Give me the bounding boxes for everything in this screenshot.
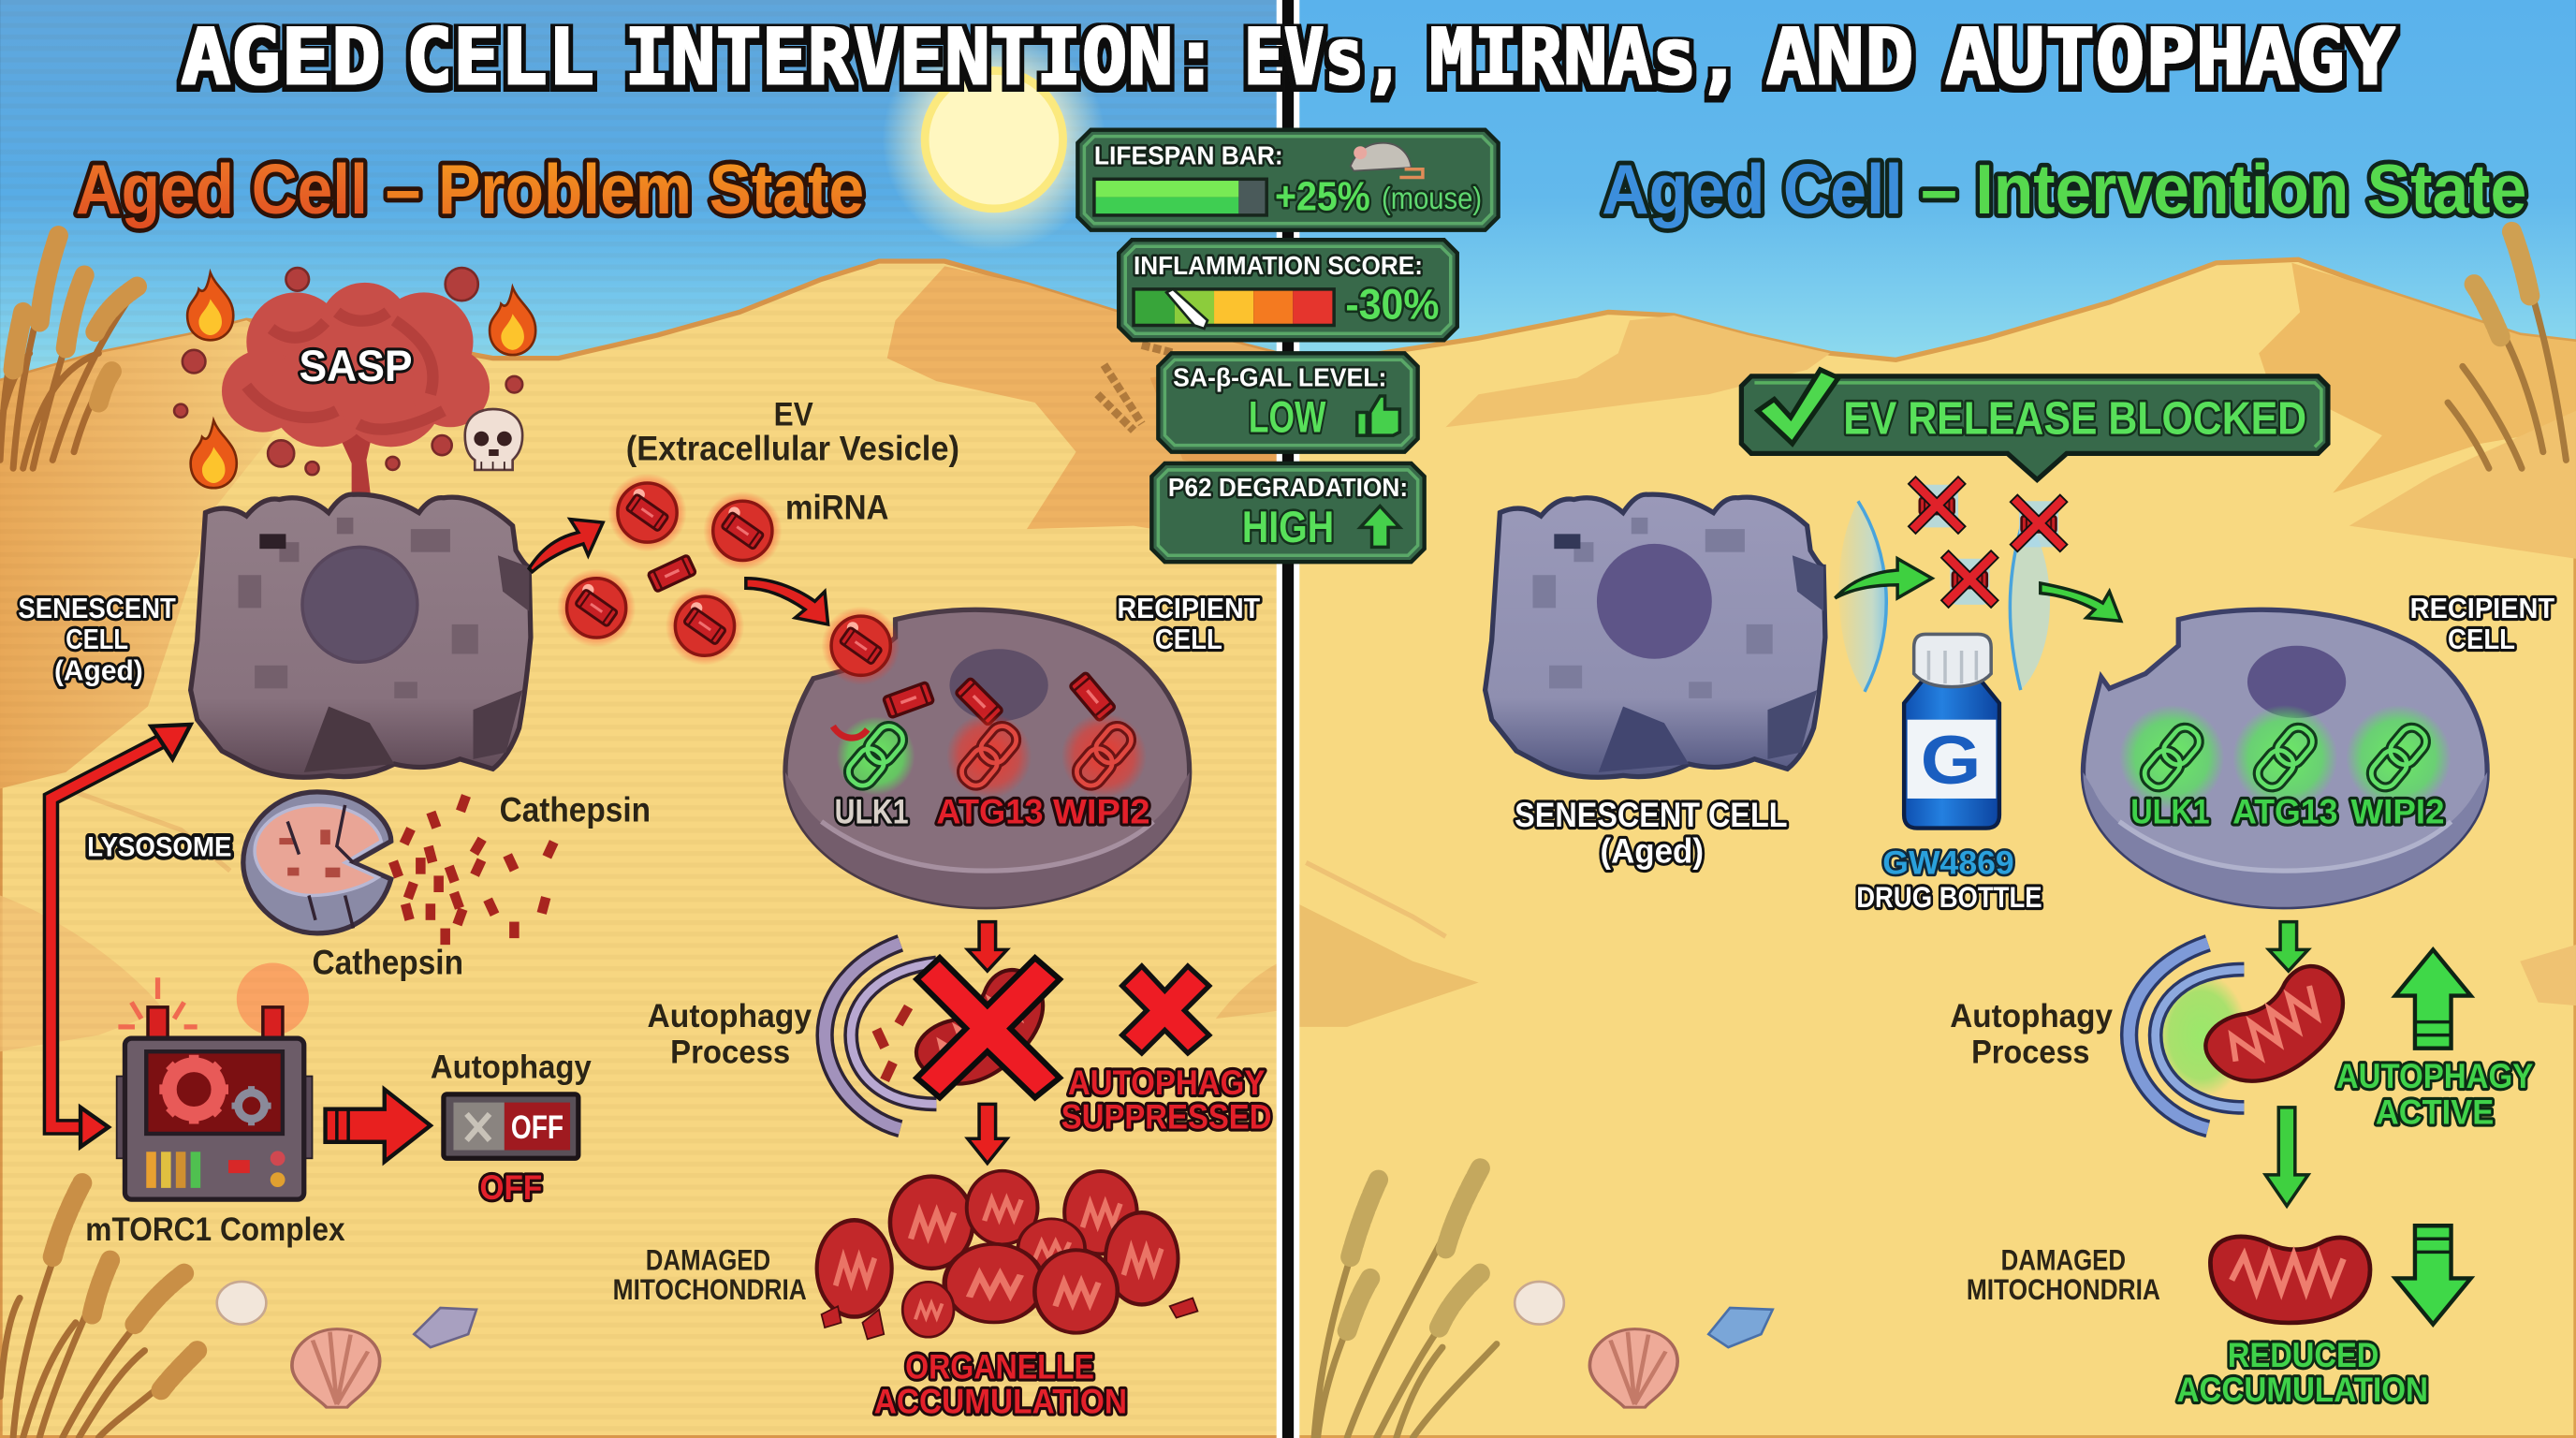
- label: recipient cell: CELL: [1155, 623, 1222, 655]
- label: reduced accumulation: [2176, 1336, 2428, 1409]
- title: INTERVENTION:: [624, 13, 1219, 103]
- label: senescent cell: (Aged): [54, 654, 143, 687]
- label: GW4869 drug bottle: GW4869: [1882, 845, 2014, 882]
- label: damaged mitochondria left: DAMAGED: [646, 1243, 770, 1277]
- label: miRNA: miRNA: [785, 489, 889, 527]
- pathway: ULK1: [2119, 705, 2224, 830]
- grass: bottom right: [1314, 1168, 1497, 1438]
- autophagy suppressed: AUTOPHAGY: [1068, 1064, 1265, 1102]
- pathway: WIPI2: WIPI2: [1053, 792, 1150, 830]
- icon: thumbs up: [1357, 396, 1399, 435]
- shells left: [217, 1282, 476, 1407]
- label: autophagy: Autophagy: [431, 1049, 592, 1085]
- label: autophagy process problem: Process: [670, 1034, 790, 1071]
- label: senescent cell intervention: SENESCENT CELL: [1515, 796, 1788, 834]
- text: SASP: SASP: [299, 342, 413, 391]
- label: senescent cell: [18, 592, 176, 687]
- label: INFLAMMATION SCORE:: [1134, 251, 1423, 280]
- SASP cloud: [174, 268, 522, 501]
- center divider: [1277, 0, 1299, 1438]
- shield left: [1838, 501, 1886, 692]
- value: HIGH: [1242, 503, 1334, 552]
- label: organelle accumulation: ACCUMULATION: [874, 1382, 1127, 1420]
- hud panel: p62 degradation: [1151, 463, 1425, 562]
- heading: problem state: Aged Cell – Problem State: [76, 150, 864, 228]
- label: senescent cell: SENESCENT: [18, 592, 176, 624]
- pathway: WIPI2: [1053, 713, 1150, 830]
- value: LOW: [1249, 393, 1326, 443]
- autophagosome active: [2130, 943, 2364, 1129]
- label: autophagy process intervention: Autophagy: [1950, 998, 2113, 1034]
- label: reduced accumulation: ACCUMULATION: [2176, 1371, 2428, 1409]
- label: cathepsin lower: Cathepsin: [313, 944, 463, 982]
- gauge bar: [1134, 289, 1334, 329]
- label: recipient cell intervention: [2410, 592, 2554, 655]
- grass: bottom left: [0, 1183, 198, 1438]
- particles: [174, 268, 522, 475]
- title: AUTOPHAGY: [1945, 13, 2395, 103]
- label: autophagy process intervention: Process: [1971, 1034, 2089, 1071]
- damaged mitochondria pile: [817, 1171, 1197, 1339]
- heading: intervention state: Aged Cell – Intervention State: [1602, 150, 2526, 228]
- lysosome: [87, 792, 391, 933]
- shells right: [1515, 1282, 1773, 1407]
- arrow: mTORC1 to switch: [326, 1090, 431, 1162]
- label: damaged mitochondria right: DAMAGED: [2001, 1243, 2126, 1277]
- autophagy active: AUTOPHAGY: [2336, 1057, 2533, 1095]
- label: damaged mitochondria right: [1967, 1243, 2160, 1306]
- icon: check mark: [1758, 370, 1838, 444]
- label: autophagy process problem: [648, 998, 812, 1071]
- arrow: recipient to autophagy problem: [968, 922, 1007, 971]
- label: recipient cell intervention: RECIPIENT: [2410, 592, 2554, 624]
- arrow: reduced accumulation: [2395, 1225, 2471, 1325]
- title: [181, 13, 2395, 103]
- text: EV RELEASE BLOCKED: [1843, 393, 2306, 444]
- label: autophagy process problem: Autophagy: [648, 998, 812, 1034]
- label: recipient cell: RECIPIENT: [1117, 592, 1260, 624]
- recipient cell: problem: [785, 607, 1190, 907]
- hud panel: sa-beta-gal: [1158, 353, 1418, 452]
- label: extracellular vesicle: EV: [774, 397, 813, 433]
- icons: flames: [187, 272, 535, 488]
- autophagy active: [2336, 949, 2533, 1131]
- label: P62 DEGRADATION:: [1168, 473, 1408, 502]
- icon: mouse: [1351, 143, 1423, 178]
- label: LIFESPAN BAR:: [1094, 141, 1283, 170]
- mitochondrion: [2197, 955, 2364, 1105]
- icon: up arrow: [1360, 506, 1399, 547]
- label: cathepsin upper: Cathepsin: [500, 791, 651, 829]
- autophagy suppressed: [1061, 966, 1271, 1137]
- icon: GW4869 drug bottle: [1904, 634, 1999, 829]
- pathway: ATG13: [2232, 705, 2337, 830]
- arrow: blocked from cell: [1835, 559, 1932, 598]
- callout: ev release blocked: [1741, 370, 2328, 479]
- label: SA-β-GAL LEVEL:: [1173, 362, 1386, 391]
- label: senescent cell intervention: [1515, 796, 1788, 870]
- pathway: ULK1: [833, 716, 915, 830]
- label: mTORC1: mTORC1 Complex: [85, 1211, 345, 1248]
- autophagy suppressed: SUPPRESSED: [1061, 1098, 1271, 1137]
- feedback arrow: mTORC1 to senescent cell: [51, 725, 191, 1147]
- pathway: ULK1: ULK1: [835, 792, 909, 830]
- sun: [883, 28, 1105, 252]
- label: GW4869 drug bottle: [1856, 845, 2042, 914]
- title: AGED: [181, 13, 381, 103]
- label: recipient cell: [1117, 592, 1260, 655]
- grass: top left: [0, 233, 138, 468]
- label: senescent cell intervention: (Aged): [1600, 831, 1704, 870]
- title: CELL: [406, 13, 594, 103]
- autophagy switch off: OFF: [511, 1109, 564, 1146]
- hud panel: lifespan bar: (mouse): [1382, 182, 1482, 216]
- label: lysosome: LYSOSOME: [87, 831, 232, 862]
- background: left desert panel: [0, 0, 1281, 1438]
- arrow: to recipient: [2041, 583, 2121, 621]
- mitochondrion reduced: [2210, 1237, 2370, 1323]
- grass: top right: [2448, 231, 2566, 468]
- recipient cell: intervention: [2083, 609, 2487, 907]
- title: EVs,: [1244, 13, 1405, 103]
- background: right desert panel: [1293, 0, 2576, 1438]
- pathway: ULK1: ULK1: [2130, 792, 2210, 830]
- arrow: cell to vesicles: [529, 520, 603, 572]
- autophagy switch off: [431, 1049, 592, 1207]
- autophagy active: ACTIVE: [2376, 1093, 2494, 1131]
- arrow: autophagy to mitochondria: [2265, 1108, 2308, 1206]
- icon: GW4869 drug bottle: G: [1921, 721, 1982, 799]
- label: GW4869 drug bottle: DRUG BOTTLE: [1856, 880, 2042, 914]
- pathway: ATG13: ATG13: [936, 792, 1044, 830]
- label: extracellular vesicle: [626, 397, 959, 467]
- extracellular vesicles with miRNA: [557, 473, 782, 666]
- pathway: WIPI2: WIPI2: [2351, 792, 2445, 830]
- shield right: [2010, 513, 2050, 690]
- value: +25%: [1275, 174, 1370, 220]
- label: extracellular vesicle: (Extracellular Vesicle): [626, 429, 959, 467]
- label: reduced accumulation: REDUCED: [2228, 1336, 2378, 1374]
- big red x: [916, 958, 1060, 1097]
- label: senescent cell: CELL: [66, 623, 128, 655]
- value: -30%: [1345, 280, 1439, 328]
- mTORC1 machine: [85, 962, 345, 1248]
- hud panel: lifespan bar: [1077, 130, 1499, 230]
- label: organelle accumulation: [874, 1347, 1127, 1420]
- label: recipient cell intervention: CELL: [2448, 623, 2515, 655]
- icon: skull: [465, 409, 522, 470]
- pathway: ATG13: ATG13: [2232, 792, 2337, 830]
- hud panel: inflammation score: [1119, 240, 1457, 340]
- label: off: OFF: [480, 1168, 542, 1207]
- label: organelle accumulation: ORGANELLE: [905, 1347, 1094, 1386]
- senescent cell: problem: [191, 494, 531, 777]
- blocked vesicles: [1909, 477, 2067, 608]
- title: MIRNAs,: [1429, 13, 1741, 103]
- arrow: recipient to autophagy active: [2269, 922, 2308, 971]
- lifespan progress bar: [1094, 179, 1266, 215]
- arrow: autophagy to pile: [968, 1104, 1007, 1164]
- label: autophagy process intervention: [1950, 998, 2113, 1071]
- pathway: ATG13: [936, 713, 1044, 830]
- arrow: vesicles to recipient: [746, 579, 828, 624]
- label: damaged mitochondria right: MITOCHONDRIA: [1967, 1272, 2160, 1306]
- senescent cell: intervention: [1486, 494, 1825, 777]
- pathway: WIPI2: [2346, 705, 2452, 830]
- title: AND: [1766, 13, 1914, 103]
- grass behind center hud: [1097, 345, 1175, 431]
- label: damaged mitochondria left: MITOCHONDRIA: [613, 1272, 807, 1306]
- autophagosome blocked: [825, 943, 1063, 1129]
- label: damaged mitochondria left: [613, 1243, 807, 1306]
- cathepsin particles: [388, 794, 558, 945]
